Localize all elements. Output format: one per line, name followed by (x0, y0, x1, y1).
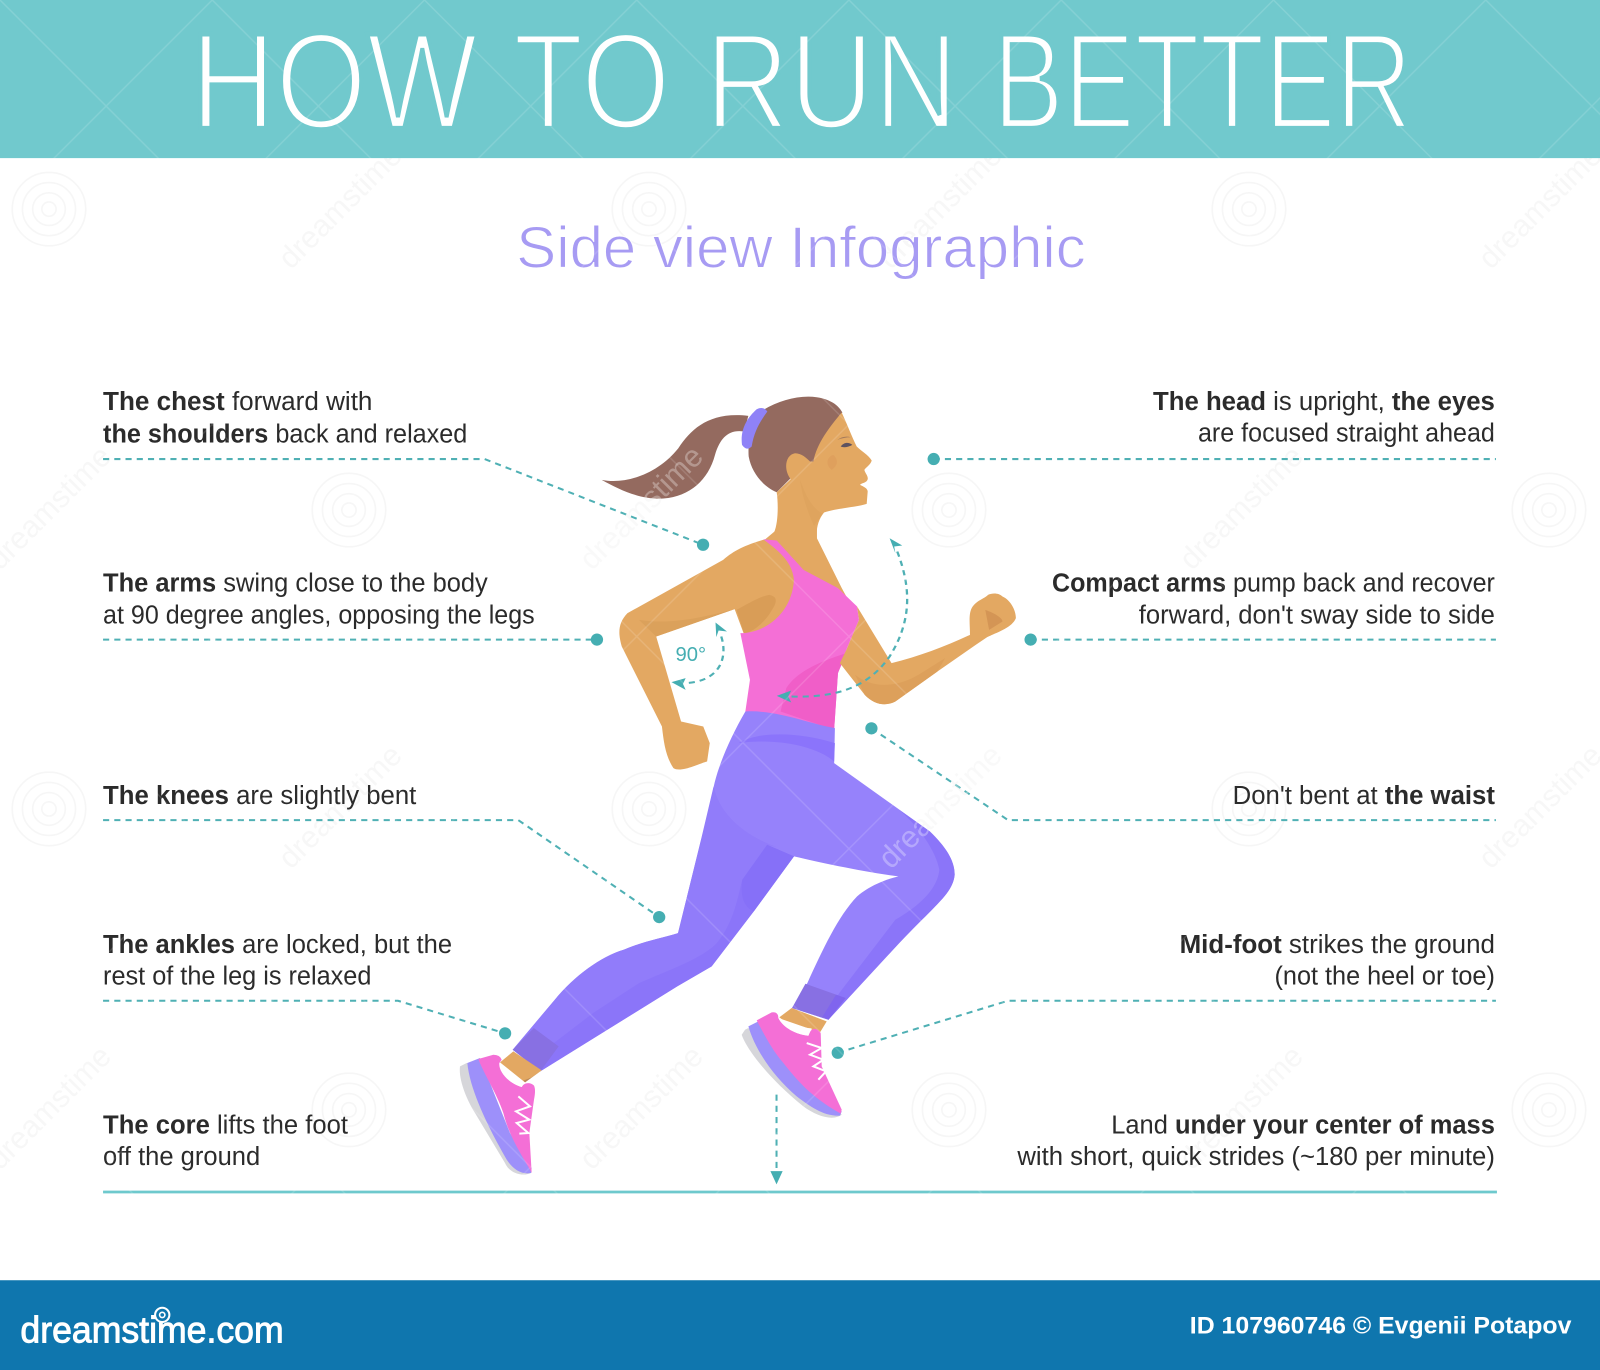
callout: waist: Don't bent at the waist (1233, 780, 1495, 810)
callout: knees (103, 780, 665, 923)
infographic canvas: dreamstime (573, 439, 710, 576)
callout: compact arms: forward, don't sway side to side (1139, 599, 1495, 629)
front arm (840, 593, 1016, 704)
infographic canvas: dreamstime (872, 738, 1009, 875)
title: HOW (191, 4, 478, 157)
title: TO (513, 4, 670, 157)
callout: center of mass (1016, 1109, 1495, 1171)
runner figure (460, 397, 1016, 1175)
callout: ankles: rest of the leg is relaxed (103, 960, 371, 990)
callout: chest (103, 386, 709, 551)
purple leggings (513, 711, 955, 1071)
arm swing arrows and 90 degree label (672, 538, 907, 702)
callout: head: The head is upright, the eyes (1153, 386, 1495, 416)
callout: head (928, 386, 1496, 465)
infographic canvas: dreamstime (872, 138, 1009, 275)
left callouts (103, 386, 709, 1171)
callout: ankles (103, 929, 511, 1039)
callout: mid-foot (832, 929, 1496, 1059)
front shoe (742, 1008, 842, 1118)
right callouts (832, 386, 1496, 1171)
head and face (757, 413, 872, 560)
back arm and shoulder (619, 523, 859, 770)
callout: compact arms (1024, 568, 1496, 646)
subtitle: Side view Infographic (516, 215, 1086, 280)
title: RUN (705, 4, 958, 157)
callout: chest: The chest forward with (103, 386, 372, 416)
callout: center of mass: with short, quick strides (~180 per minute) (1016, 1141, 1495, 1171)
infographic canvas: dreamstime (1173, 439, 1310, 576)
callout: center of mass: Land under your center of mass (1111, 1109, 1495, 1139)
callout: compact arms: Compact arms pump back and recover (1052, 568, 1495, 598)
callout: chest: the shoulders back and relaxed (103, 419, 467, 449)
arrow: landing point (770, 1095, 783, 1184)
pink tank top (740, 539, 859, 730)
infographic canvas: dreamstime (272, 738, 409, 875)
infographic canvas: dreamstime (872, 738, 1009, 875)
callout: waist (865, 722, 1496, 820)
infographic canvas: dreamstime (1173, 1039, 1310, 1176)
footer bar (0, 1280, 1600, 1370)
callout: knees: The knees are slightly bent (103, 780, 417, 810)
footer logo: dreamstime.com (20, 1309, 284, 1350)
callout: arms: at 90 degree angles, opposing the legs (103, 599, 535, 629)
infographic canvas: dreamstime (573, 1039, 710, 1176)
title: BETTER (993, 4, 1412, 157)
callout: arms: The arms swing close to the body (103, 568, 488, 598)
callout: core: The core lifts the foot (103, 1109, 349, 1139)
callout: ankles: The ankles are locked, but the (103, 929, 452, 959)
header banner (0, 0, 1600, 158)
callout: head: are focused straight ahead (1198, 418, 1495, 448)
infographic canvas: dreamstime (272, 138, 409, 275)
callout: arms (103, 568, 603, 646)
ground line (103, 1191, 1497, 1193)
callout: mid-foot: Mid-foot strikes the ground (1180, 929, 1495, 959)
title (191, 4, 1412, 157)
footer credit: ID 107960746 © Evgenii Potapov (1190, 1312, 1572, 1339)
arm swing arrows and 90 degree label: 90° (676, 644, 706, 666)
rear shoe (460, 1051, 542, 1175)
callout: core: off the ground (103, 1141, 260, 1171)
callout: mid-foot: (not the heel or toe) (1274, 960, 1495, 990)
ponytail and hair (602, 397, 842, 499)
callout: core (103, 1109, 349, 1171)
infographic canvas: dreamstime (573, 439, 710, 576)
